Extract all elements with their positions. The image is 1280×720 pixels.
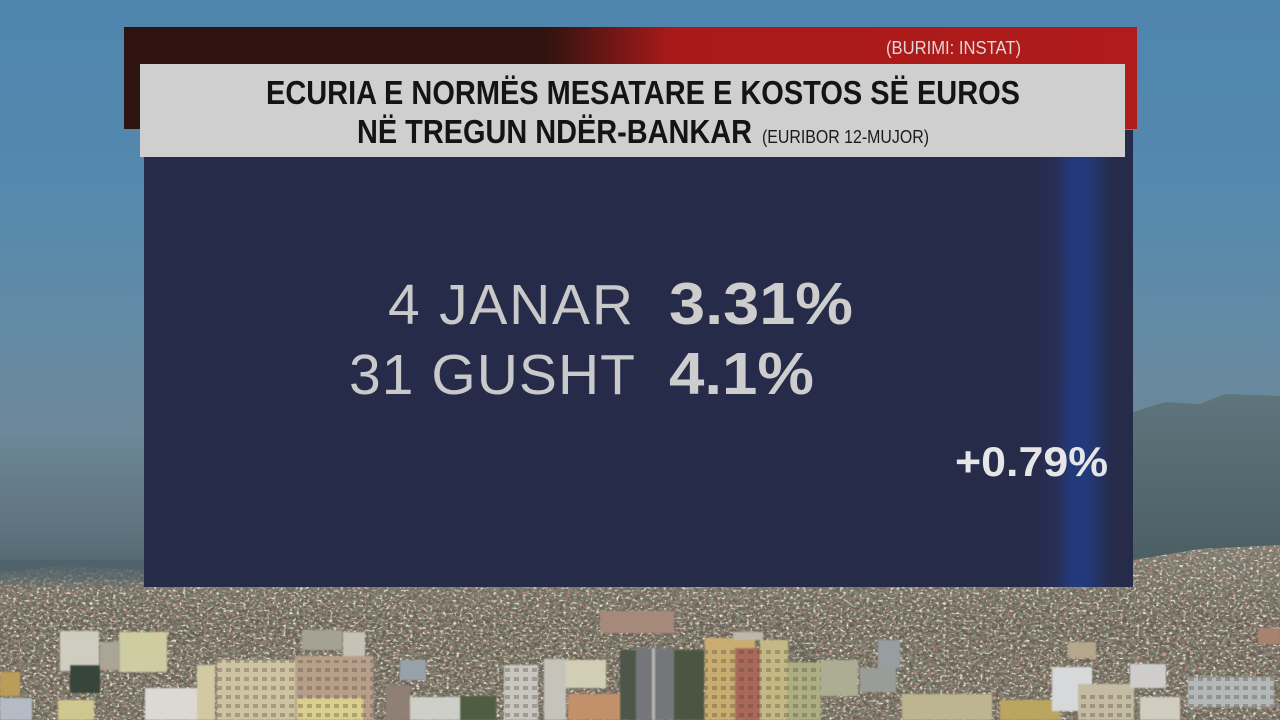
vertical blue glow stripe bbox=[1032, 130, 1112, 587]
horizon haze over the city bbox=[0, 560, 144, 590]
data row: 31 Gusht bbox=[349, 341, 814, 407]
background: city photograph bbox=[0, 540, 1280, 720]
title line 2: NË TREGUN NDËR-BANKAR bbox=[357, 113, 752, 150]
source note: (BURIMI: INSTAT) bbox=[886, 38, 1021, 58]
label: 4 Janar: 4 JANAR bbox=[388, 273, 633, 337]
header bar: dark to red gradient bbox=[124, 27, 1137, 129]
city base texture bbox=[0, 540, 1280, 720]
change callout: +0.79%: +0.79% bbox=[955, 438, 1108, 485]
title panel bbox=[140, 64, 1125, 157]
panel: navy content background bbox=[144, 130, 1133, 587]
data row: 4 Janar bbox=[388, 271, 853, 337]
title line 1: ECURIA E NORMËS MESATARE E KOSTOS SË EUROS bbox=[266, 74, 1020, 111]
value: 4.1%: 4.1% bbox=[669, 341, 814, 407]
building window pattern bbox=[217, 648, 1274, 720]
background: distant mountain bbox=[1133, 394, 1280, 565]
title qualifier: (EURIBOR 12-MUJOR) bbox=[762, 127, 929, 147]
value: 3.31%: 3.31% bbox=[669, 271, 853, 337]
label: 31 Gusht: 31 GUSHT bbox=[349, 343, 635, 407]
city buildings bbox=[0, 611, 1280, 720]
